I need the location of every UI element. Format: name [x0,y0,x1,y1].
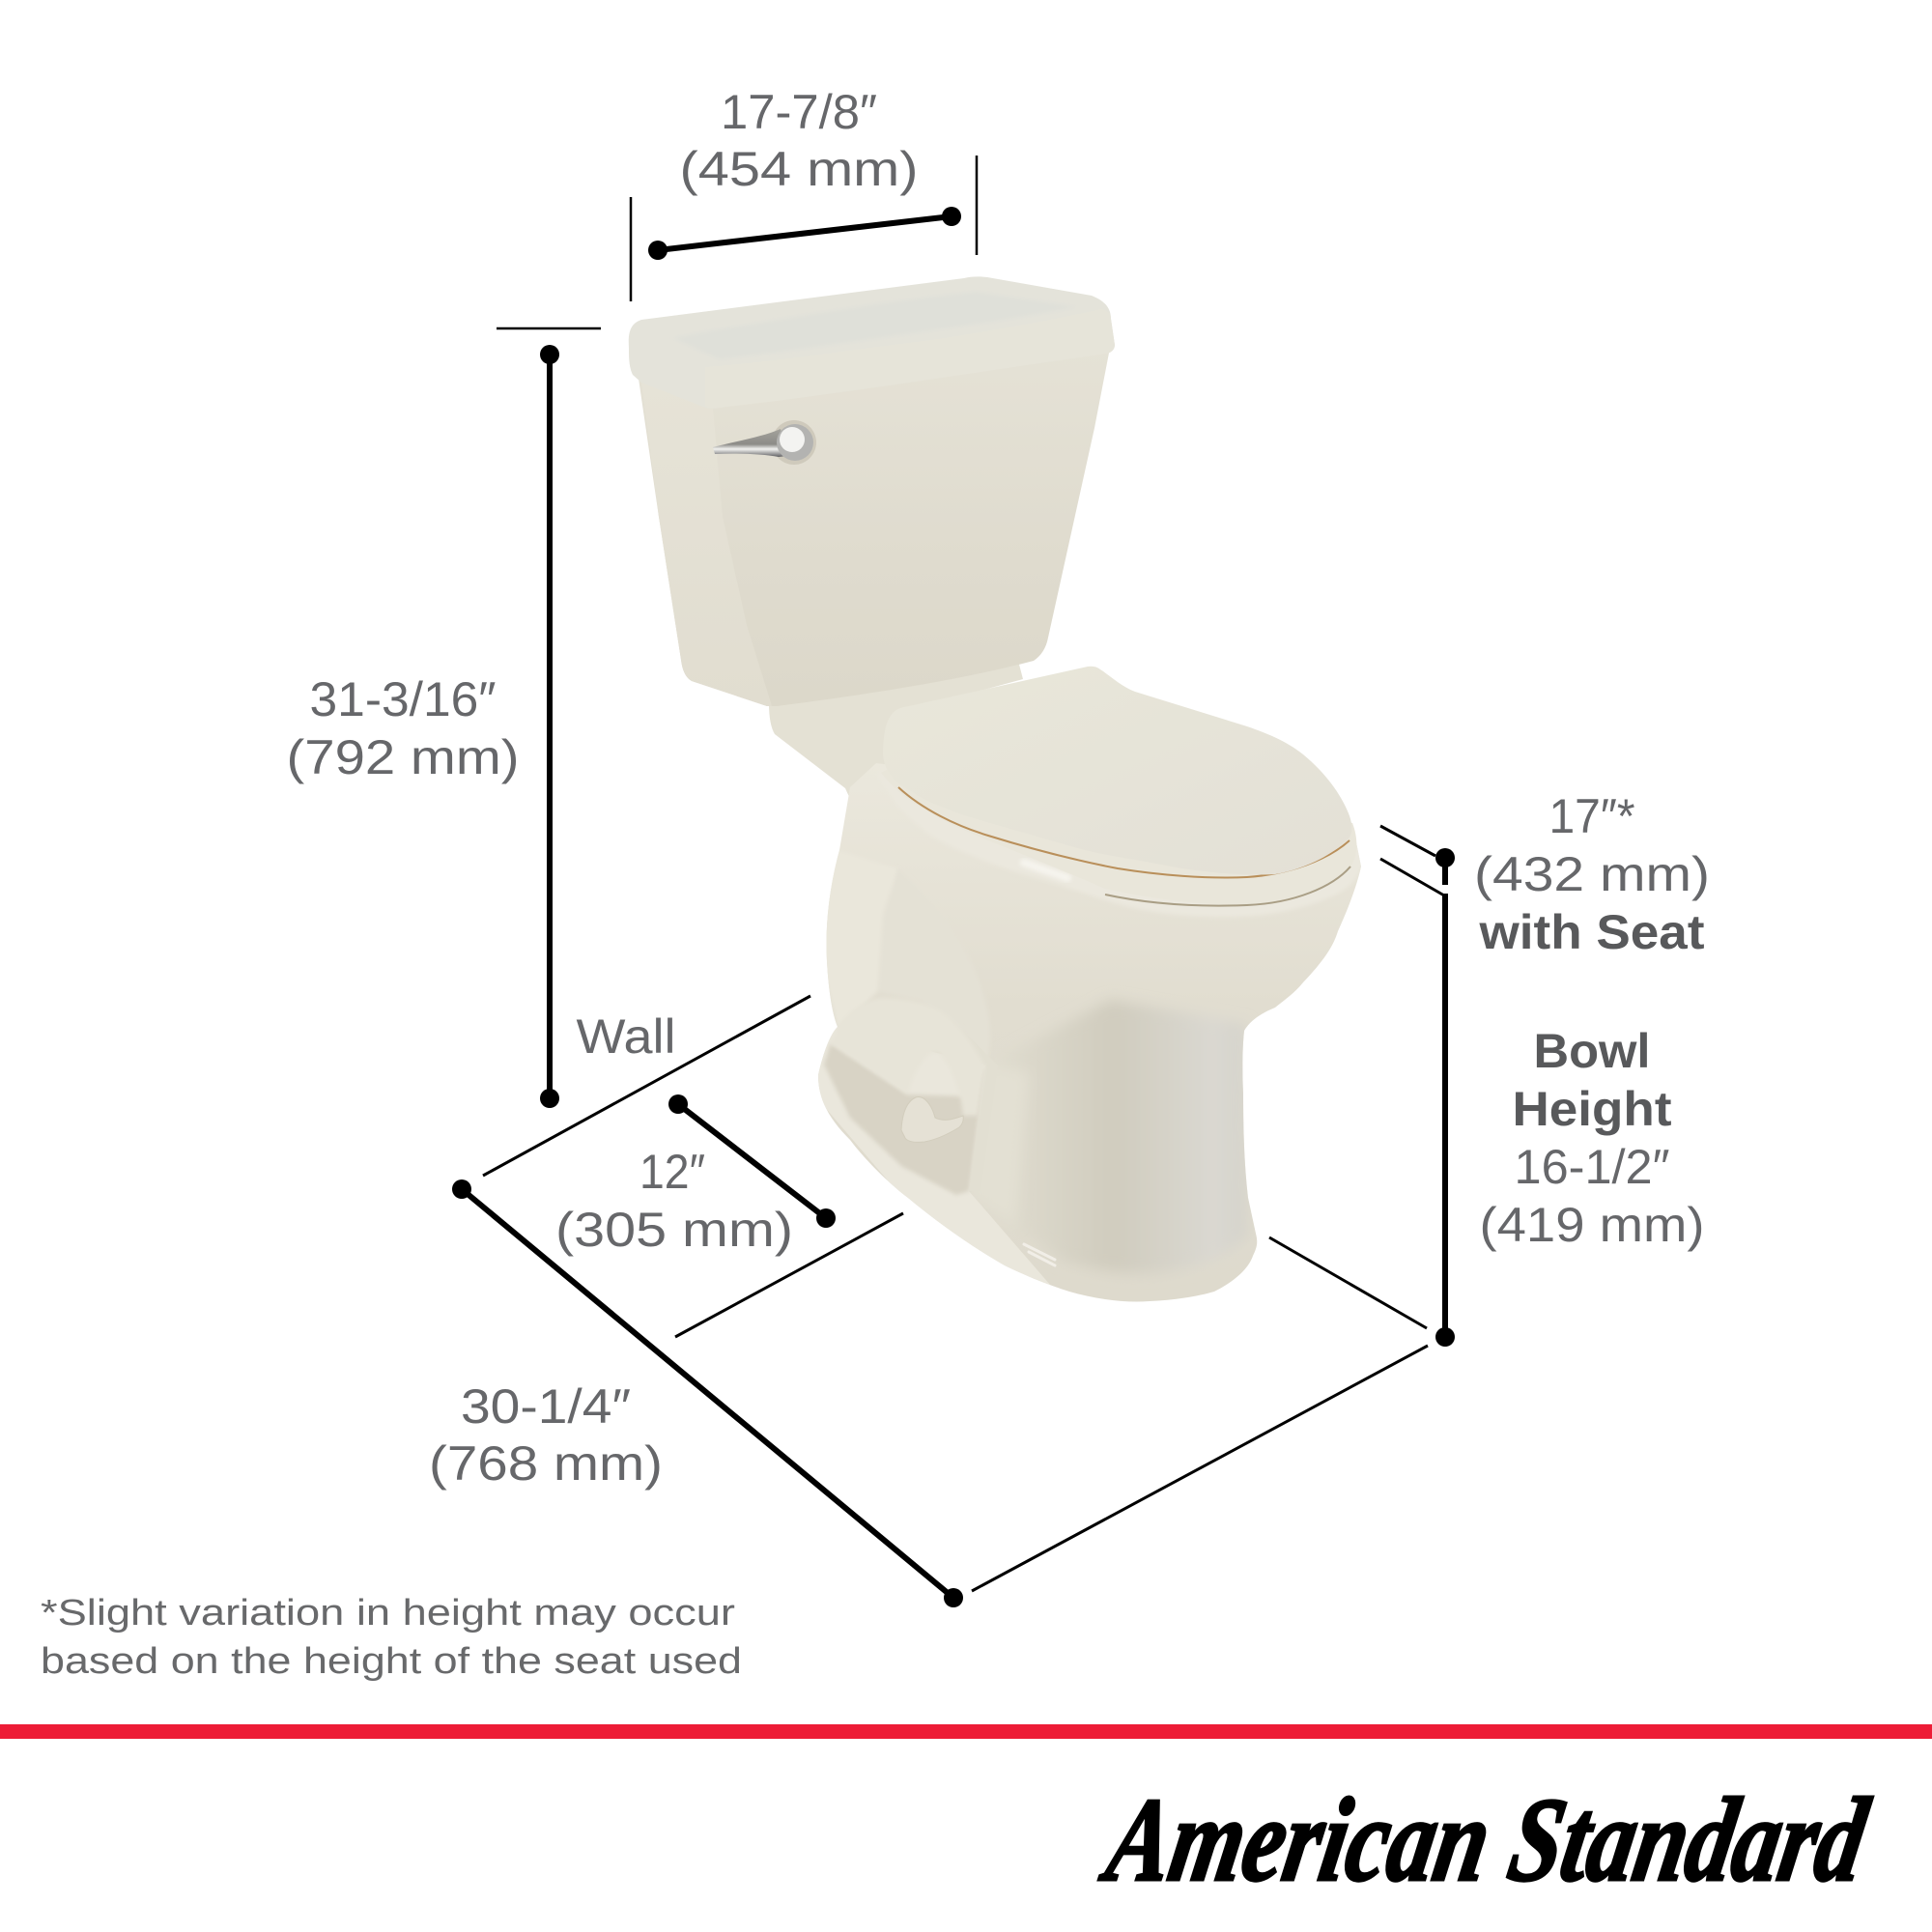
foot bolt cap [901,1097,963,1142]
depth label: 30-1/4″ [461,1379,631,1434]
bowl height label: Bowl [1534,1024,1650,1078]
lid front band [705,309,1115,409]
seat height label: (432 mm) [1474,847,1710,901]
tank width label: 17-7/8″ [721,85,877,139]
rough-in label [555,1145,793,1257]
tank width label: (454 mm) [680,142,918,196]
seat ring [881,753,1356,905]
seat height marker [1435,848,1455,885]
trapway arm [827,923,877,1022]
rim highlight [1024,863,1067,878]
red divider bar [0,1724,1932,1739]
total height label [286,672,520,784]
rear recess [878,868,990,1065]
total height label: 31-3/16″ [309,672,497,726]
dimension: tank width [631,85,977,301]
tank connector neck [769,661,1023,811]
rough-in label: (305 mm) [555,1203,793,1257]
bowl height label: (419 mm) [1480,1198,1704,1252]
neck shading [1047,1001,1245,1271]
depth label: (768 mm) [429,1436,663,1491]
footnote: based on the height of the seat used [41,1641,742,1682]
rough-in label: 12″ [639,1145,705,1199]
seat height label: 17″* [1549,789,1634,843]
rough-in bar [668,1094,836,1228]
lid top inset [673,292,1077,359]
footnote [41,1593,742,1682]
seat extension lines [1380,826,1444,895]
tank lid [629,276,1115,409]
tank width bar [648,207,961,260]
rough-in extension line [675,1213,903,1337]
dimension: bowl height [1380,789,1710,1347]
seat orange line [898,787,1350,878]
foot rim [818,1031,1049,1285]
total height label: (792 mm) [286,730,520,784]
seat height label [1474,789,1710,959]
dimension: total height [286,328,601,1108]
illustration: toilet [629,276,1364,1302]
recess edge [963,1031,998,1191]
foot panel [824,1043,985,1195]
seat lid [883,667,1351,875]
seat height label: with Seat [1478,905,1705,959]
wall reference line [483,996,810,1176]
tank left facet [641,383,772,706]
bowl height bar [1435,894,1455,1347]
bowl height label [1480,1024,1704,1252]
flush handle [713,420,816,465]
wall label: Wall [576,1009,676,1064]
tank body [638,343,1111,706]
floor front line [972,1346,1428,1591]
tank width label [680,85,918,196]
dimension: rough-in [555,1094,903,1337]
depth bar [452,1179,963,1607]
bowl height label: Height [1513,1082,1672,1136]
bowl body [818,763,1361,1302]
bowl rim [1097,894,1327,914]
floor side line [1269,1237,1427,1328]
total height bar [540,345,559,1108]
neck left highlight [969,1065,1029,1227]
foot base highlight [1024,1244,1055,1265]
dimension: total depth [429,1179,1428,1607]
trapway curve [844,1003,982,1117]
footnote: *Slight variation in height may occur [41,1593,735,1634]
depth label [429,1379,663,1491]
top extension line [497,327,601,329]
seat gap line [1105,867,1350,906]
bowl height label: 16-1/2″ [1515,1140,1669,1194]
bowl shading and details [811,763,1364,1299]
tank width extension lines [631,156,977,301]
